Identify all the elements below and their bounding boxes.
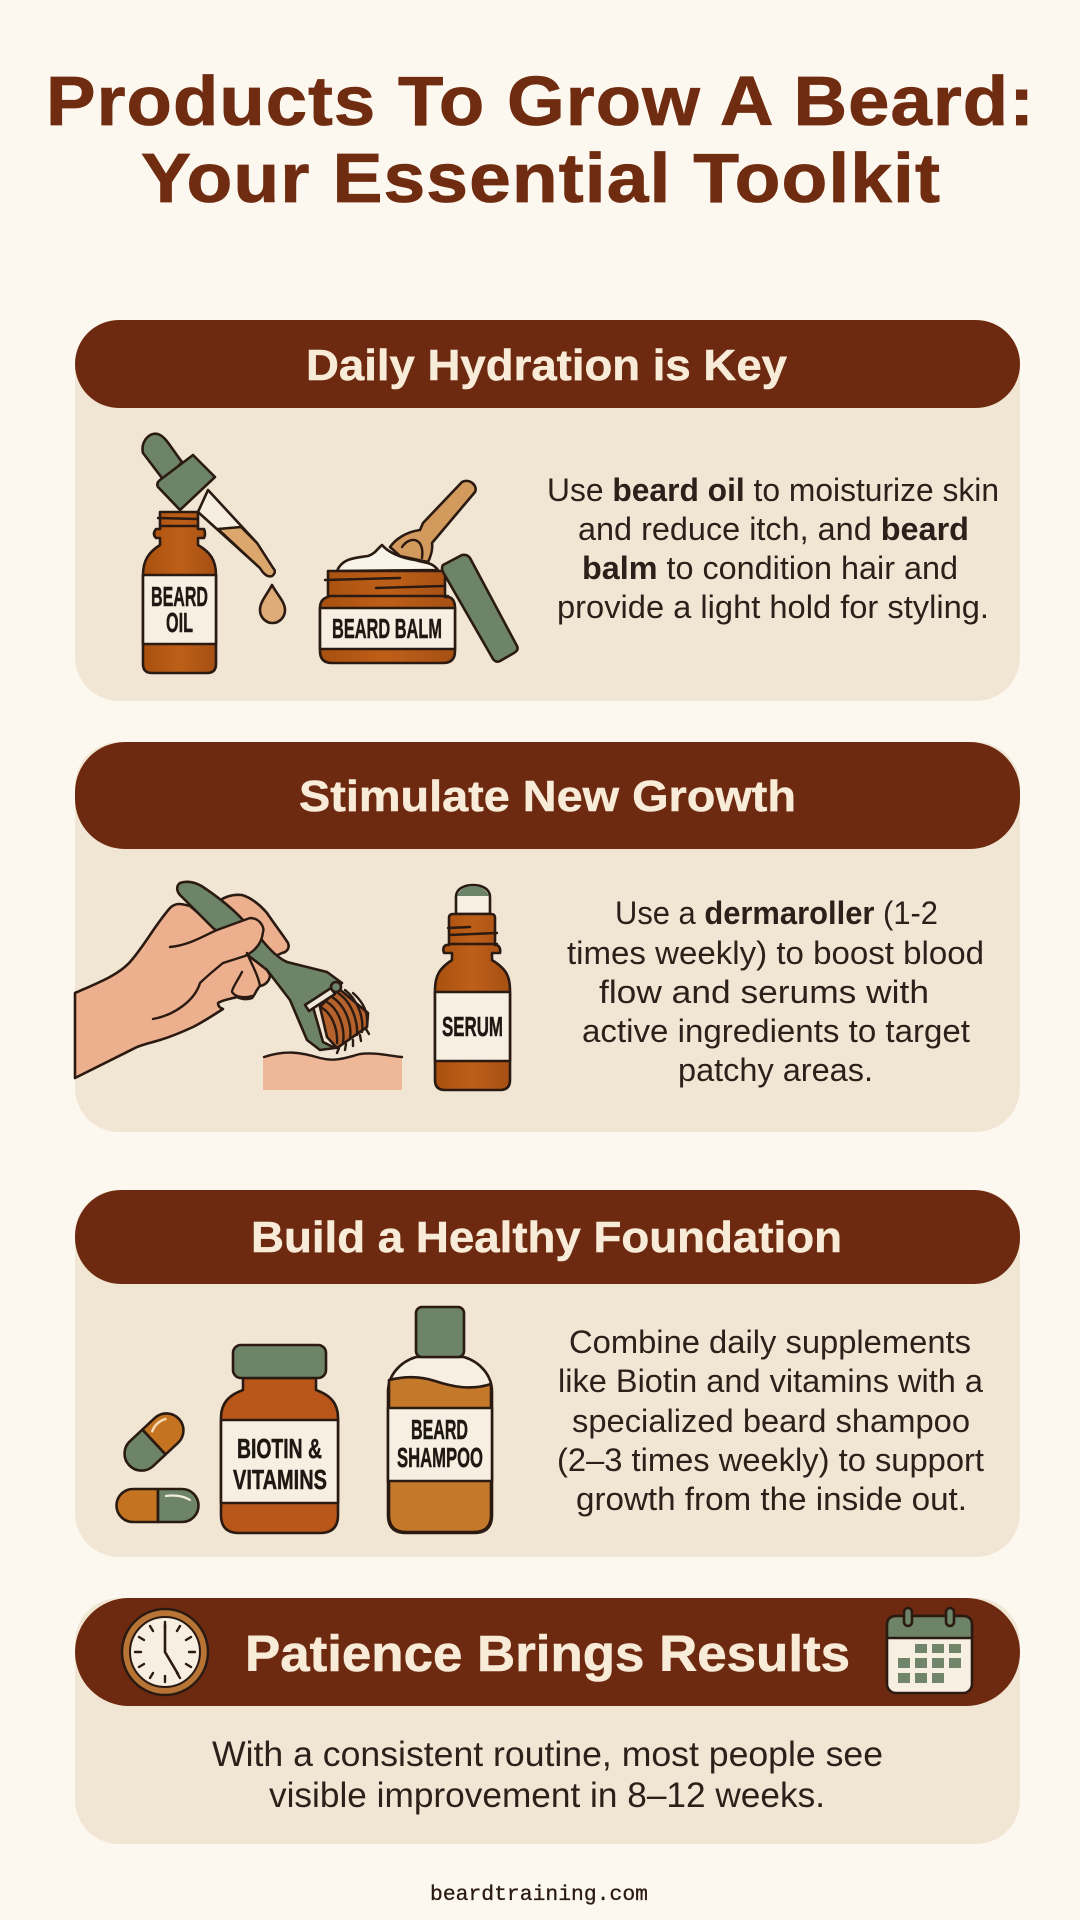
text: stimulate new growth: flow and serums with xyxy=(599,974,929,1010)
text: daily hydration xyxy=(547,472,999,625)
icon: capsules xyxy=(116,1406,198,1522)
text: healthy foundation xyxy=(557,1324,984,1517)
text: stimulate new growth: patchy areas. xyxy=(678,1052,873,1088)
panel: healthy foundation xyxy=(75,1190,1020,1557)
text: stimulate new growth xyxy=(567,895,984,1088)
header: patience brings results: Patience Brings Results xyxy=(245,1625,850,1682)
text: patience xyxy=(212,1735,883,1815)
header: healthy foundation: Build a Healthy Foundation xyxy=(251,1213,842,1262)
icon: beard oil bottle with dropper: BEARD xyxy=(151,581,208,612)
text: daily hydration: balm to condition hair and xyxy=(582,550,958,586)
title: Products To Grow A Beard: xyxy=(46,62,1035,140)
icon: serum bottle: SERUM xyxy=(442,1011,503,1042)
header: daily hydration: Daily Hydration is Key xyxy=(306,341,788,390)
text: healthy foundation: (2–3 times weekly) to support xyxy=(557,1442,984,1478)
text: stimulate new growth: Use a dermaroller (1-2 xyxy=(615,895,938,931)
text: stimulate new growth: times weekly) to boost blood xyxy=(567,935,984,971)
icon: oil drop xyxy=(260,585,285,623)
text: stimulate new growth: active ingredients to target xyxy=(582,1013,970,1049)
icon: biotin and vitamins bottle: VITAMINS xyxy=(233,1464,327,1495)
icon: beard oil bottle with dropper: OIL xyxy=(166,607,193,638)
text: healthy foundation: Combine daily supplements xyxy=(569,1324,971,1360)
icon: beard balm jar with spoon and lid xyxy=(320,481,518,663)
header: daily hydration xyxy=(75,320,1020,408)
text: healthy foundation: like Biotin and vitamins with a xyxy=(558,1363,983,1399)
title: Your Essential Toolkit xyxy=(141,139,941,217)
text: healthy foundation: growth from the inside out. xyxy=(576,1481,967,1517)
text: daily hydration: and reduce itch, and beard xyxy=(578,511,969,547)
icon: beard shampoo bottle: BEARD xyxy=(411,1414,468,1445)
footer: website: beardtraining.com xyxy=(430,1884,648,1907)
icon: beard balm jar with spoon and lid: BEARD BALM xyxy=(332,613,442,644)
icon: serum bottle xyxy=(435,885,510,1090)
panel: stimulate new growth xyxy=(75,742,1020,1132)
text: daily hydration: provide a light hold for styling. xyxy=(557,589,989,625)
panel: patience brings results xyxy=(75,1598,1020,1844)
icon: beard shampoo bottle xyxy=(388,1307,492,1533)
text: daily hydration: Use beard oil to moisturize skin xyxy=(547,472,999,508)
header: healthy foundation xyxy=(75,1190,1020,1284)
icon: hand using dermaroller xyxy=(75,882,369,1078)
header: stimulate new growth: Stimulate New Growth xyxy=(299,772,796,821)
title xyxy=(46,62,1035,217)
text: patience: With a consistent routine, most people see xyxy=(212,1735,883,1774)
icon: clock xyxy=(122,1609,208,1695)
panel: daily hydration xyxy=(75,320,1020,701)
icon: biotin and vitamins bottle xyxy=(221,1345,338,1533)
text: patience: visible improvement in 8–12 weeks. xyxy=(269,1776,825,1815)
header: patience brings results xyxy=(75,1598,1020,1706)
header: stimulate new growth xyxy=(75,742,1020,849)
icon: biotin and vitamins bottle: BIOTIN & xyxy=(237,1433,322,1464)
icon: calendar xyxy=(887,1608,972,1693)
text: healthy foundation: specialized beard shampoo xyxy=(572,1403,970,1439)
icon: beard shampoo bottle: SHAMPOO xyxy=(397,1442,483,1473)
icon: beard oil bottle with dropper xyxy=(143,434,275,673)
icon: skin surface xyxy=(263,1053,402,1090)
